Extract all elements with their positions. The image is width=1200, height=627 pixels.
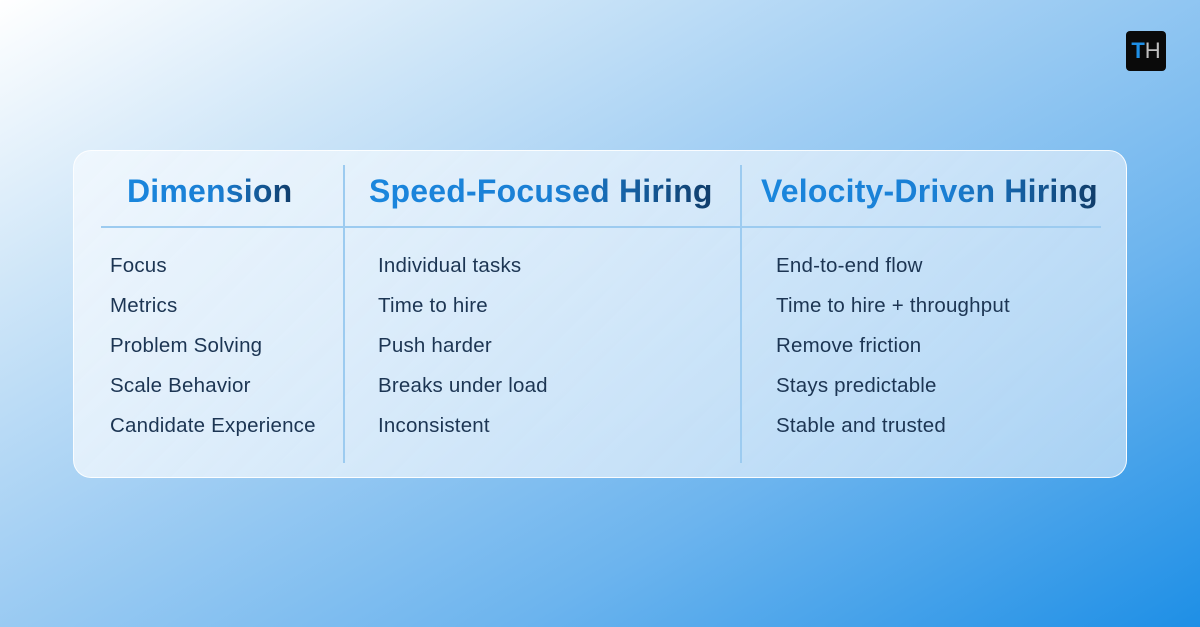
column: dimensions: Focus: [110, 254, 167, 277]
column: velocity-driven: Remove friction: [776, 334, 921, 357]
column: speed-focused: [378, 254, 548, 437]
logo: [1126, 31, 1166, 71]
column: velocity-driven: Stays predictable: [776, 374, 937, 397]
heading: Dimension: Dimension: [127, 173, 292, 209]
logo: TH: [1131, 38, 1161, 63]
column: speed-focused: Individual tasks: [378, 254, 521, 277]
column: dimensions: Problem Solving: [110, 334, 262, 357]
column: dimensions: Scale Behavior: [110, 374, 251, 397]
column: dimensions: [110, 254, 316, 437]
column: velocity-driven: Stable and trusted: [776, 414, 946, 437]
column: speed-focused: Push harder: [378, 334, 492, 357]
heading: Speed-Focused Hiring: Speed-Focused Hiring: [369, 173, 713, 209]
column: dimensions: Candidate Experience: [110, 414, 316, 437]
column: dimensions: Metrics: [110, 294, 177, 317]
column: velocity-driven: End-to-end flow: [776, 254, 923, 277]
heading: Velocity-Driven Hiring: Velocity-Driven Hiring: [761, 173, 1098, 209]
panel: comparison table: [73, 150, 1127, 478]
column: speed-focused: Breaks under load: [378, 374, 548, 397]
column: speed-focused: Inconsistent: [378, 414, 490, 437]
column: velocity-driven: Time to hire + throughput: [776, 294, 1010, 317]
column: velocity-driven: [776, 254, 1010, 437]
column: speed-focused: Time to hire: [378, 294, 488, 317]
